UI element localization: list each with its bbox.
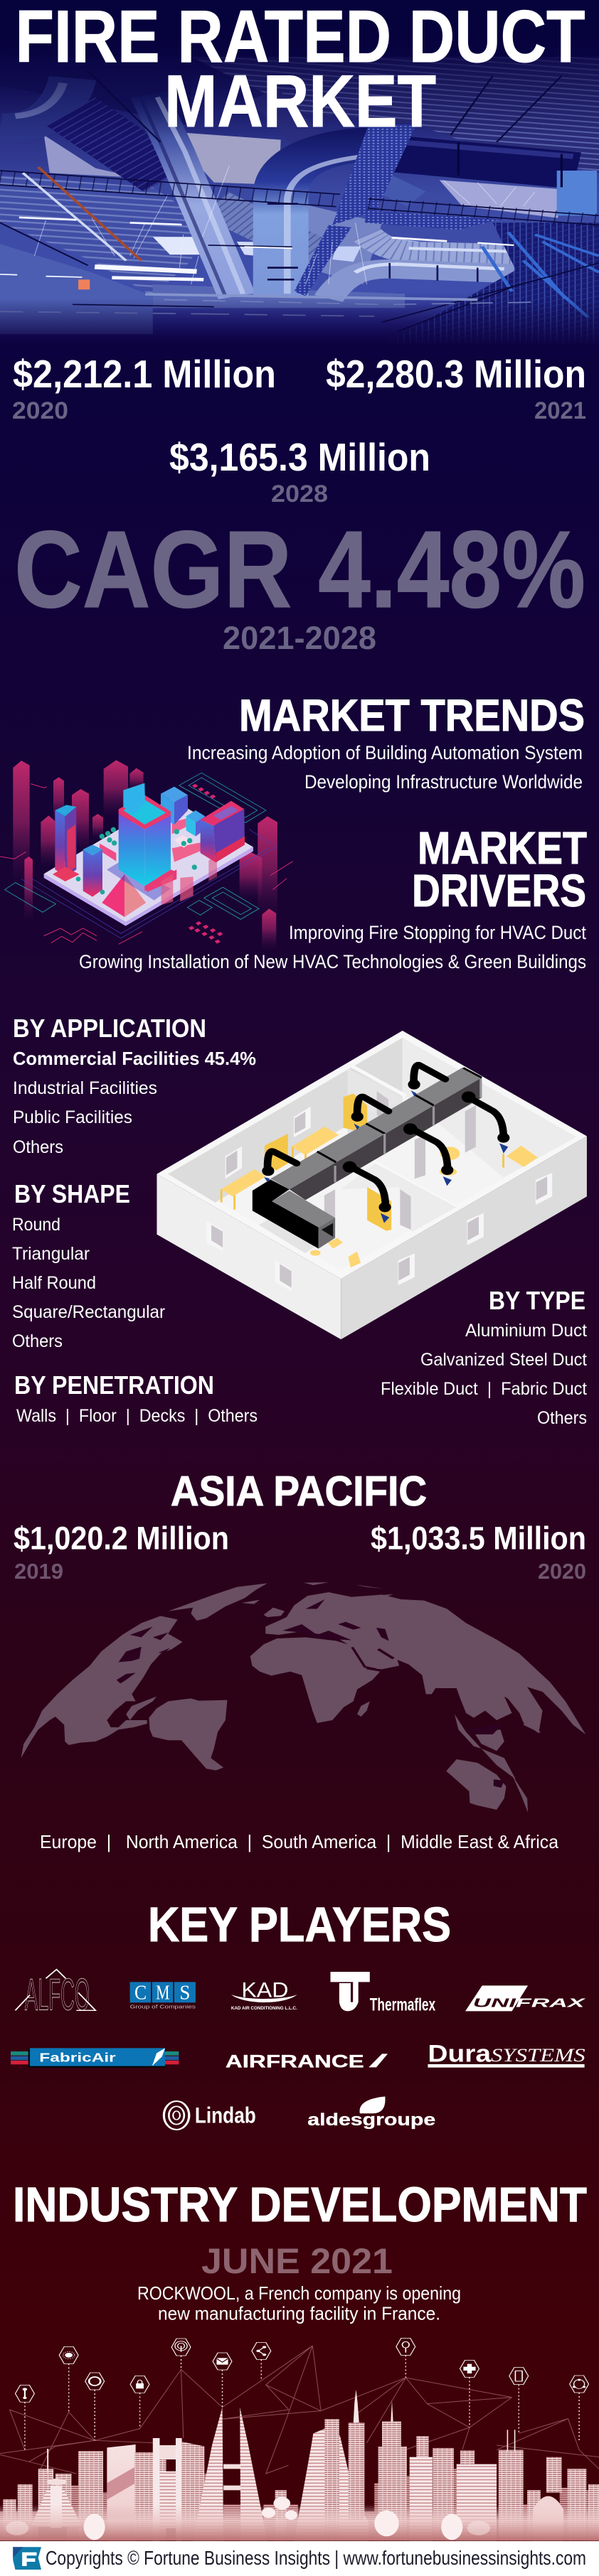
- logo: CMS: M: [156, 1982, 169, 2004]
- logo: CMS: [130, 1982, 196, 2010]
- city platform: [44, 847, 253, 926]
- segment: by type: Aluminium Duct: [465, 1321, 587, 1341]
- dotted connectors: [25, 2355, 579, 2450]
- stat: 2020 market size: [12, 352, 276, 424]
- stat: 2028 market size: 2028: [271, 481, 328, 508]
- segment: by shape: [12, 1179, 165, 1351]
- logo: CMS: Group of Companies: [130, 2004, 196, 2010]
- windows: [206, 1107, 552, 1292]
- title: [16, 0, 585, 143]
- icon: envelope: [213, 2353, 232, 2370]
- logo: Thermaflex: [331, 1972, 435, 2014]
- back row of buildings: [0, 2469, 599, 2540]
- logo: Unifrax: FRAX: [516, 1996, 586, 2009]
- title: MARKET: [164, 60, 436, 143]
- stat: 2028 market size: [169, 435, 430, 508]
- logo: DuraSystems: [428, 2039, 585, 2068]
- stat: Asia Pacific 2020: $1,033.5 Million: [371, 1520, 586, 1557]
- icon: share: [252, 2342, 271, 2359]
- footer band: [0, 2541, 599, 2576]
- logo: FabricAir: [11, 2048, 179, 2068]
- logo: Aldes Groupe: [307, 2096, 435, 2129]
- logo: Unifrax: [465, 1985, 586, 2011]
- flexible black hoses with blue diffusers: [267, 1065, 504, 1207]
- towers: [161, 794, 174, 825]
- segment: by type: Flexible Duct | Fabric Duct: [381, 1379, 587, 1399]
- trees: [6, 2497, 490, 2540]
- segment: by type: BY TYPE: [489, 1286, 585, 1315]
- company logos: ALFCO: [25, 1969, 90, 2019]
- segment: by application: [13, 1014, 256, 1157]
- icon: smartphone: [509, 2368, 529, 2385]
- section: market drivers: [79, 822, 587, 972]
- logo: KAD: KAD AIR CONDITIONING L.L.C.: [231, 2005, 297, 2010]
- CAGR callout: 2021-2028: [223, 620, 376, 656]
- heading: key players: KEY PLAYERS: [148, 1897, 451, 1952]
- yellow furniture: [221, 1127, 538, 1267]
- section: market trends: [187, 691, 585, 793]
- illustration: isometric room with duct system: [157, 1031, 587, 1339]
- logo: Lindab: Lindab: [195, 2103, 256, 2127]
- buildings: [0, 2390, 599, 2540]
- icon: map pin: [396, 2338, 415, 2355]
- trees: [76, 827, 197, 894]
- magenta background towers: [13, 760, 277, 950]
- development description: [137, 2282, 461, 2324]
- development description: new manufacturing facility in France.: [158, 2303, 440, 2324]
- hero photo: ventilation ducts under a warehouse roof: [0, 36, 599, 358]
- world map globe: [13, 1582, 585, 1813]
- heading: Asia Pacific: ASIA PACIFIC: [171, 1468, 427, 1515]
- company logos: Thermaflex: [370, 1995, 435, 2014]
- segment: by type: Galvanized Steel Duct: [420, 1350, 587, 1370]
- stat: Asia Pacific 2019: 2019: [14, 1559, 63, 1584]
- icon: medical cross: [460, 2360, 479, 2377]
- stat: Asia Pacific 2019: [14, 1520, 229, 1584]
- logo: Aldes Groupe: aldesgroupe: [307, 2110, 435, 2129]
- icon: wifi antenna: [171, 2339, 191, 2356]
- logo: FabricAir: FabricAir: [39, 2051, 116, 2065]
- development date: JUNE 2021: [201, 2241, 393, 2281]
- network lines: [0, 2346, 599, 2474]
- logo: Air France: AIRFRANCE: [226, 2052, 364, 2071]
- company logos: [11, 1969, 586, 2130]
- segment: by application: Commercial Facilities 45.4%: [13, 1048, 256, 1069]
- smart city skyline with icon network: [0, 2338, 599, 2540]
- logo: Unifrax: UNI: [473, 1996, 516, 2009]
- icon: wrench: [15, 2385, 34, 2402]
- stat: Asia Pacific 2020: 2020: [538, 1559, 586, 1584]
- logo: KAD: KAD: [241, 1977, 288, 2002]
- stat: Asia Pacific 2020: [371, 1520, 586, 1584]
- stat: 2021 market size: 2021: [534, 397, 586, 424]
- stat: Asia Pacific 2019: $1,020.2 Million: [14, 1520, 229, 1557]
- icon: users circle: [570, 2376, 589, 2393]
- logo: CMS: C: [134, 1982, 147, 2004]
- segment: by penetration: Walls | Floor | Decks | Others: [16, 1406, 258, 1426]
- other regions list: Europe | North America | South America | Middle East & Africa: [40, 1831, 559, 1852]
- icon: gear: [85, 2373, 105, 2390]
- segment: by penetration: BY PENETRATION: [14, 1370, 214, 1400]
- segment: by shape: BY SHAPE: [14, 1179, 130, 1208]
- icon: padlock: [130, 2376, 149, 2393]
- segment: by shape: Half Round: [12, 1273, 96, 1293]
- main rectangular duct: [253, 1068, 482, 1249]
- segment: by application: Others: [13, 1137, 63, 1157]
- segment: by shape: Others: [12, 1331, 63, 1351]
- segment: by application: Industrial Facilities: [13, 1078, 157, 1098]
- stat: 2020 market size: $2,212.1 Million: [13, 352, 276, 396]
- segment: by type: [381, 1286, 587, 1428]
- stat: 2028 market size: $3,165.3 Million: [169, 435, 430, 479]
- segment: by shape: Square/Rectangular: [12, 1302, 165, 1322]
- stat: 2020 market size: 2020: [12, 397, 68, 424]
- stat: 2021 market size: [326, 352, 586, 424]
- logo: KAD: [231, 1977, 297, 2010]
- segment: by application: Public Facilities: [13, 1107, 132, 1127]
- logo: DuraSystems: Dura: [428, 2039, 492, 2067]
- logo: CMS: S: [179, 1982, 190, 2004]
- illustration: isometric smart city: [0, 760, 293, 950]
- icon: sun: [59, 2346, 78, 2363]
- footer logo: [13, 2547, 41, 2570]
- segment: by penetration: [14, 1370, 258, 1426]
- logo: Alafco: [15, 1969, 95, 2019]
- segment: by shape: Round: [12, 1215, 60, 1235]
- development description: ROCKWOOL, a French company is opening: [137, 2282, 461, 2304]
- logo: Lindab: [164, 2101, 256, 2130]
- segment: by application: BY APPLICATION: [13, 1014, 206, 1043]
- segment: by shape: Triangular: [12, 1244, 90, 1264]
- segment: by type: Others: [537, 1408, 587, 1428]
